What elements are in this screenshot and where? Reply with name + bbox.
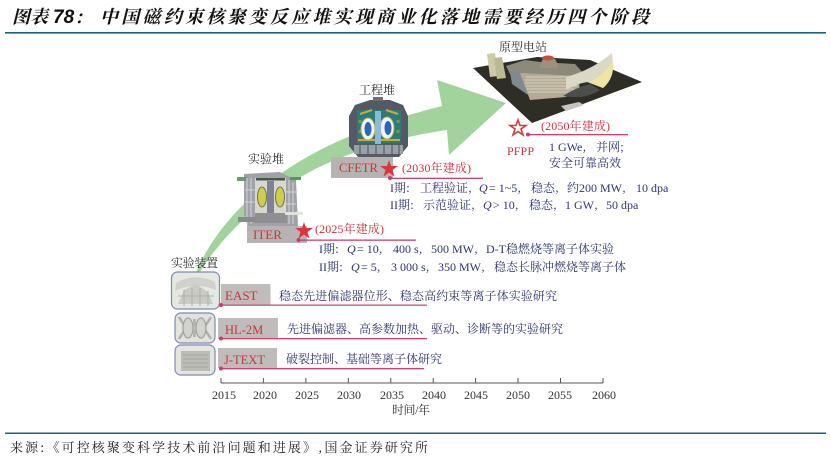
- axis year labels: 2045: [464, 388, 488, 402]
- row: J-TEXT: [175, 345, 442, 375]
- ITER build year: (2025年建成): [315, 221, 384, 236]
- CFETR phase II: > 10,: [493, 196, 519, 213]
- icon: CFETR reactor: [349, 97, 408, 157]
- ITER phase II: 350 MW,: [438, 258, 485, 275]
- HL-2M timeline: [219, 336, 427, 340]
- chart: development roadmap: [171, 39, 669, 417]
- CFETR phase I: = 1~5,: [489, 179, 521, 196]
- axis year labels: 2030: [337, 388, 361, 402]
- title: [12, 3, 651, 29]
- ITER phase II: Q: [351, 260, 360, 274]
- PFPP specs: 1 GWe,: [549, 138, 586, 155]
- icon: outlined star: [510, 120, 526, 135]
- icon: red star: [380, 160, 398, 176]
- title: 图表: [12, 7, 48, 27]
- ITER phase I: Q: [347, 242, 356, 256]
- label: engineering reactor: 工程堆: [359, 82, 395, 97]
- label: experimental devices: 实验装置: [171, 255, 218, 270]
- row: HL-2M: [175, 313, 563, 343]
- axis year labels: 2060: [592, 388, 616, 402]
- PFPP specs: [549, 138, 624, 170]
- EAST description: 稳态先进偏滤器位形、稳态高约束等离子体实验研究: [279, 288, 557, 303]
- ITER phase II: = 5,: [361, 258, 381, 275]
- EAST name: EAST: [225, 288, 258, 303]
- source note: 来源:《可控核聚变科学技术前沿问题和进展》,国金证券研究所: [10, 437, 428, 456]
- CFETR phase I: I期:: [390, 179, 410, 196]
- title: 78: [53, 7, 75, 28]
- J-TEXT description: 破裂控制、基础等离子体研究: [286, 351, 442, 366]
- ITER phase I: 400 s,: [393, 240, 423, 257]
- PFPP specs: 安全可靠高效: [549, 155, 621, 170]
- CFETR build year: (2030年建成): [402, 160, 471, 175]
- axis year labels: 2020: [253, 388, 277, 402]
- CFETR phase I: Q: [479, 181, 488, 195]
- stage: CFETR: [331, 82, 669, 213]
- ITER phase I: D-T稳燃烧等离子体实验: [486, 241, 614, 256]
- CFETR phase I: 约200 MW,: [567, 179, 626, 196]
- EAST tag: [221, 284, 270, 305]
- axis title: 时间/年: [392, 402, 430, 417]
- CFETR phase II: 示范验证,: [423, 196, 475, 213]
- axis year labels: 2015: [212, 388, 236, 402]
- J-TEXT tag: [218, 348, 277, 368]
- HL-2M tag: [218, 318, 278, 339]
- axis year labels: 2055: [548, 388, 572, 402]
- title: 中国磁约束核聚变反应堆实现商业化落地需要经历四个阶段: [100, 7, 651, 27]
- CFETR phase II: Q: [483, 198, 492, 212]
- CFETR phase I: 稳态,: [531, 179, 559, 196]
- footer rule: [5, 432, 826, 434]
- CFETR phase II: 稳态,: [529, 196, 557, 213]
- row: EAST: [172, 272, 557, 309]
- ITER phase II: II期:: [319, 258, 343, 275]
- icon: J-TEXT device: [175, 345, 215, 375]
- axis year labels: [212, 388, 616, 402]
- icon: EAST device: [172, 272, 220, 309]
- axis year labels: 2035: [380, 388, 404, 402]
- title: :: [76, 3, 83, 29]
- label: prototype power plant: 原型电站: [499, 39, 547, 54]
- icon: HL-2M device: [175, 313, 215, 343]
- J-TEXT name: J-TEXT: [224, 353, 265, 367]
- ITER name: ITER: [253, 227, 282, 242]
- label: experimental reactor: 实验堆: [248, 151, 284, 166]
- icon: power plant: [473, 53, 642, 123]
- ITER phase II: 稳态长脉冲燃烧等离子体: [494, 259, 626, 274]
- stage: PFPP: [473, 39, 642, 170]
- CFETR phase II: 50 dpa: [606, 198, 639, 212]
- CFETR phase I: 10 dpa: [636, 181, 669, 195]
- title rule: [5, 32, 826, 34]
- CFETR phase II: II期:: [390, 196, 414, 213]
- arrow: green roadmap curve: [196, 80, 506, 272]
- EAST timeline: [219, 303, 427, 307]
- CFETR name: CFETR: [339, 161, 379, 175]
- axis year labels: 2050: [506, 388, 530, 402]
- CFETR tag: [331, 157, 393, 178]
- CFETR timeline: [388, 176, 483, 180]
- icon: ITER reactor: [237, 172, 303, 227]
- stage: ITER: [237, 151, 626, 275]
- PFPP build year: (2050年建成): [541, 118, 610, 133]
- J-TEXT timeline: [219, 366, 424, 370]
- CFETR phase II: 1 GW,: [565, 196, 598, 213]
- HL-2M description: 先进偏滤器、高参数加热、驱动、诊断等的实验研究: [287, 321, 563, 336]
- axis year labels: 2025: [295, 388, 319, 402]
- ITER timeline: [296, 238, 416, 242]
- CFETR phase I: 工程验证,: [420, 179, 472, 196]
- time axis: [212, 378, 616, 417]
- ITER phase I: I期:: [319, 240, 339, 257]
- PFPP name: PFPP: [507, 144, 534, 158]
- ITER phase II: 3 000 s,: [391, 258, 430, 275]
- HL-2M name: HL-2M: [225, 323, 263, 337]
- PFPP specs: 并网;: [596, 138, 624, 155]
- axis year labels: 2040: [422, 388, 446, 402]
- ITER phase I: 500 MW,: [431, 240, 478, 257]
- icon: red star: [295, 222, 313, 238]
- ITER tag: [247, 226, 307, 243]
- ITER phase I: = 10,: [357, 240, 383, 257]
- PFPP timeline: [526, 132, 628, 136]
